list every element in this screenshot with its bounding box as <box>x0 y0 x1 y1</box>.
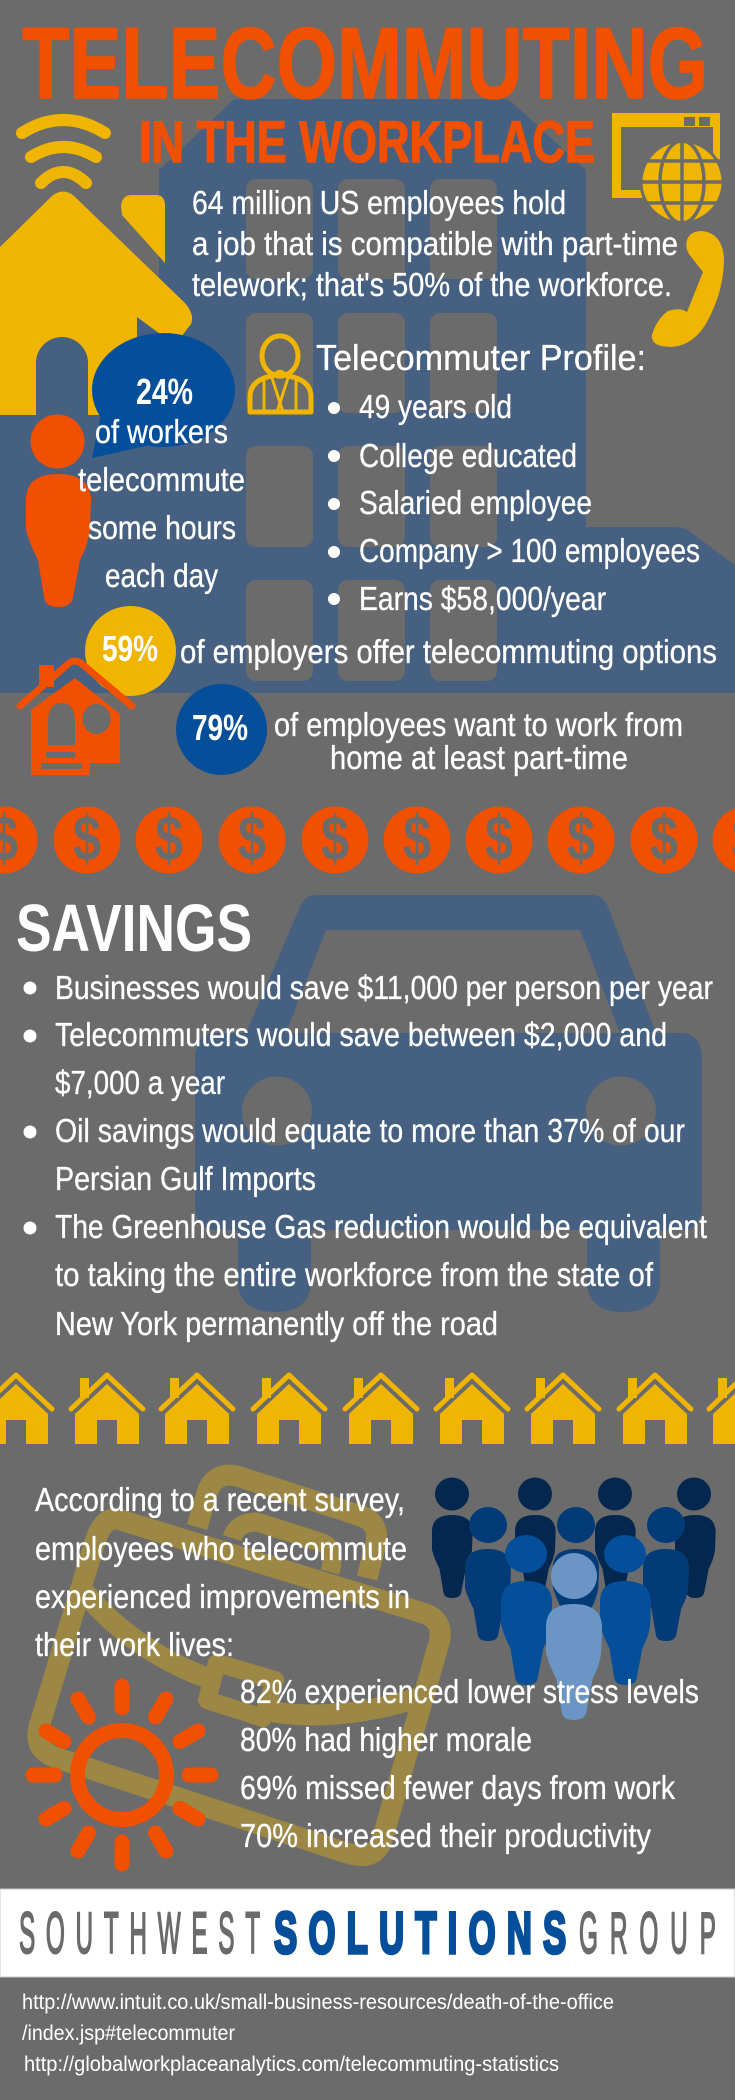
79% employees text: home at least part-time <box>330 739 628 776</box>
survey intro text <box>35 1481 410 1663</box>
background car silhouette <box>195 895 702 1312</box>
survey intro text: experienced improvements in <box>35 1578 410 1615</box>
savings list <box>24 969 713 1342</box>
24% workers statistic: of workers <box>95 413 228 450</box>
survey results list <box>240 1673 699 1854</box>
telecommuter profile list: Earns $58,000/year <box>359 580 606 617</box>
icon: sun <box>33 1686 211 1864</box>
survey intro text: According to a recent survey, <box>35 1481 405 1518</box>
telecommuter profile list: College educated <box>359 437 577 474</box>
24% workers statistic: each day <box>105 557 218 594</box>
24% workers statistic: some hours <box>88 509 236 546</box>
59% circle: 59% <box>102 628 158 669</box>
dollar coin row: $ <box>321 802 349 874</box>
dollar coin row: $ <box>73 802 101 874</box>
savings list: $7,000 a year <box>55 1064 225 1101</box>
house row <box>0 1375 735 1444</box>
intro text: a job that is compatible with part-time <box>192 225 678 262</box>
79% circle <box>176 684 267 775</box>
79% employees text: of employees want to work from <box>274 706 683 743</box>
logo band <box>0 1889 735 1977</box>
dollar coin row: $ <box>238 802 266 874</box>
survey results list: 70% increased their productivity <box>240 1817 651 1854</box>
savings list: to taking the entire workforce from the state of <box>55 1256 654 1293</box>
icon: browser window and globe <box>612 113 724 224</box>
background briefcase outline <box>38 1475 440 1856</box>
icon: orange person <box>26 414 91 607</box>
savings list: New York permanently off the road <box>55 1305 498 1342</box>
logo band: GROUP <box>579 1902 716 1966</box>
dollar coin row: $ <box>485 802 513 874</box>
dollar coin row <box>0 802 735 874</box>
24% workers statistic: telecommute <box>78 461 245 498</box>
telecommuter profile list: Salaried employee <box>359 484 592 521</box>
source links: http://www.intuit.co.uk/small-business-resources/death-of-the-office <box>22 1991 614 2014</box>
survey results list: 80% had higher morale <box>240 1721 532 1758</box>
source links: http://globalworkplaceanalytics.com/telecommuting-statistics <box>24 2053 559 2076</box>
59% circle <box>85 606 176 696</box>
background building silhouette <box>0 99 735 693</box>
24% workers statistic <box>78 371 245 594</box>
intro text: 64 million US employees hold <box>192 184 566 221</box>
source links: /index.jsp#telecommuter <box>22 2022 235 2045</box>
group of people icon <box>432 1478 716 1720</box>
logo band: SOUTHWEST <box>19 1902 260 1966</box>
logo band: SOLUTIONS <box>274 1902 566 1966</box>
intro text: telework; that's 50% of the workforce. <box>192 266 672 303</box>
icon: profile person outline <box>250 336 311 412</box>
icon: yellow house with chimney <box>0 192 192 415</box>
intro text <box>192 184 678 303</box>
dollar coin row: $ <box>650 802 678 874</box>
telecommuter profile list <box>328 388 700 617</box>
speech bubble <box>92 333 235 458</box>
79% circle: 79% <box>192 707 248 748</box>
icon: wifi signal <box>22 120 105 183</box>
24% workers statistic: 24% <box>136 371 193 412</box>
telecommuter profile heading: Telecommuter Profile: <box>316 337 646 378</box>
savings heading: SAVINGS <box>16 891 252 966</box>
survey intro text: their work lives: <box>35 1626 234 1663</box>
survey intro text: employees who telecommute <box>35 1530 407 1567</box>
savings list: Persian Gulf Imports <box>55 1160 316 1197</box>
dollar coin row: $ <box>155 802 183 874</box>
dollar coin row: $ <box>403 802 431 874</box>
source links <box>22 1991 614 2076</box>
survey results list: 69% missed fewer days from work <box>240 1769 675 1806</box>
subtitle: IN THE WORKPLACE <box>139 110 595 175</box>
79% employees text <box>274 706 683 776</box>
telecommuter profile list: 49 years old <box>359 388 512 425</box>
icon: telephone handset <box>652 231 724 347</box>
icon: orange small house <box>20 661 132 775</box>
dollar coin row: $ <box>567 802 595 874</box>
